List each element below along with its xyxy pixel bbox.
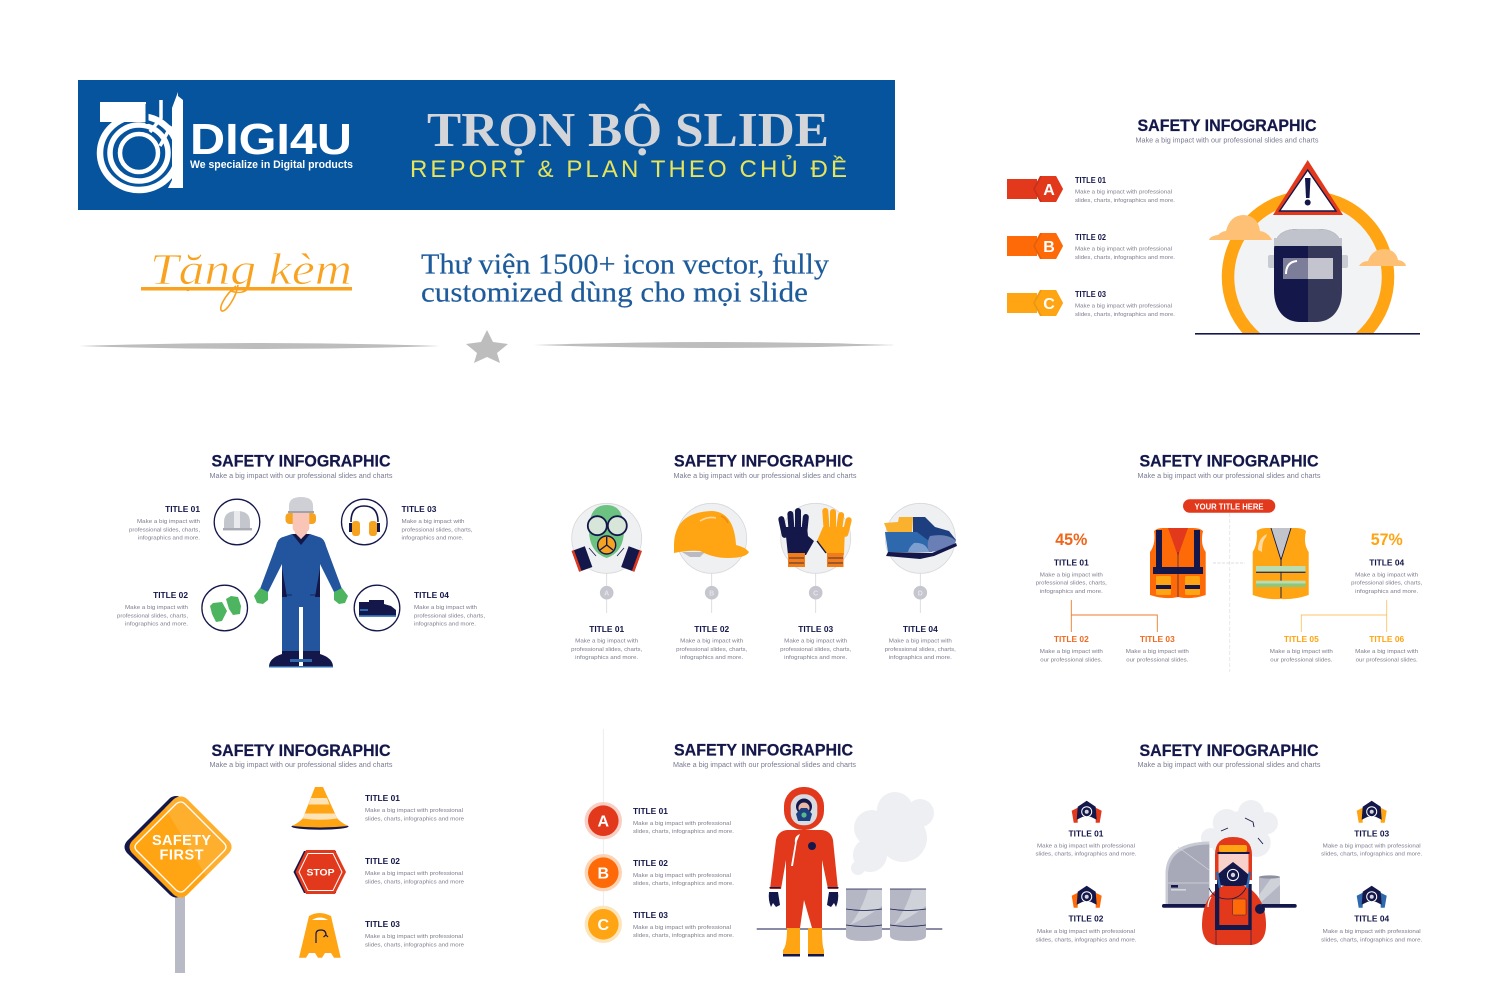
- text: title 01: slides, charts, infographics and more: [365, 816, 464, 822]
- text: title 01: TITLE 01: [589, 624, 624, 634]
- text: title 03: Make a big impact with professional: [633, 925, 731, 931]
- text: title 02: [365, 856, 464, 885]
- marker B: B: [598, 866, 609, 882]
- connectors and letter markers: [600, 573, 927, 613]
- worker scene: [1162, 800, 1297, 945]
- subheading: Make a big impact with our professional slides and charts: [674, 473, 857, 480]
- icon: orange vest: [1150, 528, 1206, 598]
- icon: hard hat: [214, 499, 260, 545]
- text: title 01: Make a big impact with: [575, 639, 638, 645]
- text: title 01: professional slides, charts,: [1036, 580, 1107, 586]
- text: title 05: TITLE 05: [1284, 634, 1319, 644]
- heading: SAFETY INFOGRAPHIC: [1138, 116, 1316, 135]
- item C: Make a big impact with professional: [1075, 304, 1172, 310]
- text: title 03: TITLE 03: [798, 624, 833, 634]
- text: title 04: Make a big impact with professional: [1323, 929, 1421, 935]
- icon: respirator 02: [1072, 886, 1102, 908]
- text: title 01: professional slides, charts,: [129, 527, 200, 533]
- text: title 03: slides, charts, infographics and more.: [1321, 852, 1423, 858]
- bonus script label: Tặng kèm: [150, 245, 352, 294]
- text: title 03: slides, charts, infographics and more: [365, 942, 464, 948]
- text: title 03: our professional slides.: [1126, 657, 1189, 663]
- text: title 02: infographics and more.: [125, 622, 188, 628]
- marker C: [585, 906, 622, 943]
- text: title 04: [414, 590, 485, 628]
- stat: 57%: 57%: [1371, 530, 1403, 549]
- connectors and letter markers: B: [709, 590, 714, 597]
- text: title 04: TITLE 04: [903, 624, 938, 634]
- stat: 45%: 45%: [1055, 530, 1087, 549]
- connectors and letter markers: C: [813, 590, 818, 597]
- text: title 02: [117, 590, 188, 628]
- sign: safety first: SAFETY: [152, 833, 211, 849]
- icon: yellow vest: [1253, 528, 1309, 599]
- banner title: TRỌN BỘ SLIDE: [427, 102, 829, 157]
- text: title 01: Make a big impact with: [137, 519, 200, 525]
- mask: [1268, 229, 1348, 322]
- text: title 02: TITLE 02: [1054, 634, 1089, 644]
- text: title 03: Make a big impact with professional: [1323, 843, 1421, 849]
- text: title 04: Make a big impact with: [414, 605, 477, 611]
- heading: SAFETY INFOGRAPHIC: [1140, 452, 1318, 470]
- icon: ear muffs: [342, 499, 387, 545]
- marker B: [585, 854, 622, 891]
- text: title 01: Make a big impact with professional: [1037, 843, 1135, 849]
- item C: slides, charts, infographics and more.: [1075, 312, 1175, 318]
- text: title 03: TITLE 03: [365, 919, 400, 929]
- divider with star: [79, 330, 895, 363]
- pill heading: [1183, 499, 1275, 513]
- sign: safety first: [124, 796, 232, 973]
- text: title 01: infographics and more.: [575, 655, 639, 661]
- connectors and letter markers: D: [918, 590, 923, 597]
- smoke cloud: [851, 792, 934, 875]
- text: title 06: [1355, 634, 1418, 663]
- text: title 02: professional slides, charts,: [117, 613, 188, 619]
- text: title 02: [676, 624, 748, 661]
- text: title 03: [1126, 634, 1189, 663]
- text: title 04: [1351, 558, 1423, 595]
- text: title 02: [1036, 914, 1137, 943]
- heading: SAFETY INFOGRAPHIC: [212, 741, 390, 760]
- connectors and letter markers: A: [604, 590, 609, 597]
- text: title 03: professional slides, charts,: [780, 647, 852, 653]
- text: title 02: slides, charts, infographics and more.: [1036, 937, 1137, 943]
- icon: traffic cone: [292, 787, 348, 830]
- subheading: Make a big impact with our professional slides and charts: [1136, 138, 1319, 144]
- text: title 04: [1321, 914, 1423, 943]
- heading: SAFETY INFOGRAPHIC: [1140, 741, 1318, 760]
- text: title 01: TITLE 01: [633, 806, 668, 816]
- text: title 04: professional slides, charts,: [414, 613, 485, 619]
- text: title 01: [1036, 558, 1107, 595]
- icon: hard hat: [674, 503, 749, 573]
- text: title 03: TITLE 03: [1140, 634, 1175, 644]
- text: title 03: slides, charts, infographics and more.: [633, 933, 734, 939]
- slide: safety vests: [1036, 452, 1423, 672]
- item B: B: [1043, 239, 1055, 256]
- worker figure: [254, 497, 348, 668]
- sign: safety first: FIRST: [160, 848, 204, 864]
- text: title 01: slides, charts, infographics and more.: [1036, 852, 1137, 858]
- item A: slides, charts, infographics and more.: [1075, 198, 1175, 204]
- smoke: [1201, 800, 1278, 857]
- marker A: A: [598, 814, 610, 830]
- logo: [100, 92, 353, 190]
- text: title 01: slides, charts, infographics and more.: [633, 829, 734, 835]
- text: title 06: Make a big impact with: [1355, 649, 1418, 655]
- text: title 02: [1040, 634, 1103, 663]
- text: title 02: TITLE 02: [1069, 914, 1104, 924]
- icon: stop sign: STOP: [306, 866, 334, 878]
- hazmat figure: [769, 787, 838, 956]
- item B: Make a big impact with professional: [1075, 246, 1172, 252]
- item C: TITLE 03: [1075, 289, 1106, 299]
- text: title 01: [129, 504, 200, 542]
- item B: slides, charts, infographics and more.: [1075, 255, 1175, 261]
- text: title 02: Make a big impact with professional: [1037, 929, 1135, 935]
- subheading: Make a big impact with our professional slides and charts: [210, 762, 393, 769]
- illustration: welding mask in ring: [1195, 160, 1420, 335]
- text: title 01: Make a big impact with professional: [365, 808, 463, 814]
- text: title 02: Make a big impact with: [680, 639, 743, 645]
- text: title 01: infographics and more.: [138, 536, 200, 542]
- marker A: [585, 802, 622, 839]
- logo: We specialize in Digital products: [190, 159, 353, 171]
- connector left: [1071, 600, 1157, 632]
- text: title 01: TITLE 01: [365, 793, 400, 803]
- banner: [78, 80, 895, 210]
- item A: [1007, 175, 1175, 204]
- text: title 03: TITLE 03: [633, 910, 668, 920]
- slide: PPE row: [571, 452, 957, 661]
- text: title 01: professional slides, charts,: [571, 647, 643, 653]
- text: title 02: slides, charts, infographics and more: [365, 879, 464, 885]
- text: title 03: Make a big impact with: [402, 519, 464, 525]
- text: title 04: [885, 624, 956, 661]
- text: title 03: [402, 504, 473, 542]
- text: title 04: TITLE 04: [1369, 558, 1404, 568]
- heading: SAFETY INFOGRAPHIC: [212, 452, 390, 470]
- text: title 01: TITLE 01: [1069, 828, 1104, 838]
- text: title 03: infographics and more.: [402, 536, 464, 542]
- text: title 03: Make a big impact with professional: [365, 934, 463, 940]
- text: title 04: slides, charts, infographics and more.: [1321, 937, 1423, 943]
- text: title 01: TITLE 01: [1054, 558, 1089, 568]
- text: title 01: Make a big impact with: [1040, 572, 1103, 578]
- heading: SAFETY INFOGRAPHIC: [674, 741, 853, 760]
- clouds: [1209, 215, 1406, 266]
- icon: respirator 03: [1357, 801, 1387, 823]
- text: title 03: Make a big impact with: [784, 639, 847, 645]
- text: title 02: TITLE 02: [694, 624, 729, 634]
- bonus description: Thư viện 1500+ icon vector, fully: [421, 248, 830, 280]
- text: title 04: Make a big impact with: [889, 639, 952, 645]
- text: title 02: slides, charts, infographics and more.: [633, 881, 734, 887]
- text: title 04: TITLE 04: [1354, 914, 1389, 924]
- text: title 06: TITLE 06: [1369, 634, 1404, 644]
- icon: gas mask: [572, 503, 642, 573]
- text: title 01: [1036, 828, 1137, 858]
- icon: boots: [354, 585, 400, 631]
- banner subtitle: REPORT & PLAN THEO CHỦ ĐỀ: [410, 154, 847, 183]
- icon: stop sign: [294, 850, 346, 894]
- text: title 03: professional slides, charts,: [402, 527, 473, 533]
- text: title 02: TITLE 02: [153, 590, 188, 600]
- text: title 03: [780, 624, 852, 661]
- text: title 02: professional slides, charts,: [676, 647, 748, 653]
- text: title 02: Make a big impact with: [125, 605, 188, 611]
- text: title 01: [633, 806, 734, 835]
- text: title 02: infographics and more.: [680, 655, 744, 661]
- text: title 02: Make a big impact with professional: [633, 873, 731, 879]
- barrels: [846, 889, 926, 941]
- icon: safety boots: [884, 503, 957, 573]
- text: title 04: infographics and more.: [414, 622, 476, 628]
- text: title 04: infographics and more.: [889, 655, 952, 661]
- slide: welding mask: [1007, 119, 1420, 335]
- connector right: [1301, 600, 1387, 632]
- text: title 03: [365, 919, 464, 948]
- worker hood and respirator: [1215, 837, 1252, 888]
- icon: respirator 04: [1357, 886, 1387, 908]
- subheading: Make a big impact with our professional slides and charts: [210, 473, 393, 480]
- icon: work gloves: [778, 503, 852, 573]
- bonus description: customized dùng cho mọi slide: [421, 276, 808, 308]
- text: title 01: infographics and more.: [1040, 589, 1103, 595]
- text: title 03: TITLE 03: [402, 504, 437, 514]
- text: title 05: [1270, 634, 1333, 663]
- text: title 02: our professional slides.: [1040, 657, 1103, 663]
- text: title 04: professional slides, charts,: [1351, 580, 1423, 586]
- item A: TITLE 01: [1075, 175, 1106, 185]
- worker body: [1202, 884, 1266, 945]
- item B: TITLE 02: [1075, 232, 1106, 242]
- text: title 05: Make a big impact with: [1270, 649, 1333, 655]
- bonus script label: [141, 245, 352, 311]
- item B: [1007, 232, 1175, 261]
- item A: A: [1043, 182, 1055, 199]
- text: title 04: Make a big impact with: [1355, 572, 1418, 578]
- slide: hazmat suit: [585, 729, 942, 956]
- pill heading: YOUR TITLE HERE: [1194, 501, 1264, 511]
- text: title 05: our professional slides.: [1270, 657, 1333, 663]
- subheading: Make a big impact with our professional slides and charts: [673, 762, 857, 769]
- heading: SAFETY INFOGRAPHIC: [674, 452, 853, 470]
- icon: respirator 01: [1072, 801, 1102, 823]
- item C: C: [1043, 296, 1055, 313]
- marker C: C: [598, 917, 610, 934]
- item C: [1007, 289, 1175, 318]
- subheading: Make a big impact with our professional slides and charts: [1138, 762, 1321, 769]
- machine: [1166, 842, 1209, 904]
- slide: worker PPE: [117, 452, 485, 668]
- warning triangle: [1273, 160, 1343, 215]
- text: title 03: Make a big impact with: [1126, 649, 1189, 655]
- icon: gloves: [202, 585, 248, 631]
- text: title 03: [1321, 828, 1423, 858]
- text: title 03: TITLE 03: [1354, 828, 1389, 838]
- text: title 02: [633, 858, 734, 887]
- logo: DIGI4U: [190, 115, 352, 164]
- subheading: Make a big impact with our professional slides and charts: [1138, 473, 1321, 480]
- text: title 01: [365, 793, 464, 822]
- text: title 02: TITLE 02: [365, 856, 400, 866]
- bonus description: [421, 248, 830, 308]
- item A: Make a big impact with professional: [1075, 190, 1172, 196]
- text: title 02: TITLE 02: [633, 858, 668, 868]
- text: title 04: professional slides, charts,: [885, 647, 956, 653]
- text: title 02: Make a big impact with: [1040, 649, 1103, 655]
- text: title 01: TITLE 01: [165, 504, 200, 514]
- text: title 04: TITLE 04: [414, 590, 449, 600]
- text: title 03: [633, 910, 734, 939]
- text: title 06: our professional slides.: [1356, 657, 1418, 663]
- barrel: [1259, 875, 1280, 904]
- text: title 04: infographics and more.: [1355, 589, 1419, 595]
- text: title 03: infographics and more.: [784, 655, 848, 661]
- slide: respirator worker: [1036, 741, 1423, 945]
- text: title 02: Make a big impact with professional: [365, 871, 463, 877]
- text: title 01: [571, 624, 643, 661]
- slide: road signs: [124, 741, 464, 973]
- icon: wet floor sign: [299, 913, 341, 958]
- text: title 01: Make a big impact with professional: [633, 821, 731, 827]
